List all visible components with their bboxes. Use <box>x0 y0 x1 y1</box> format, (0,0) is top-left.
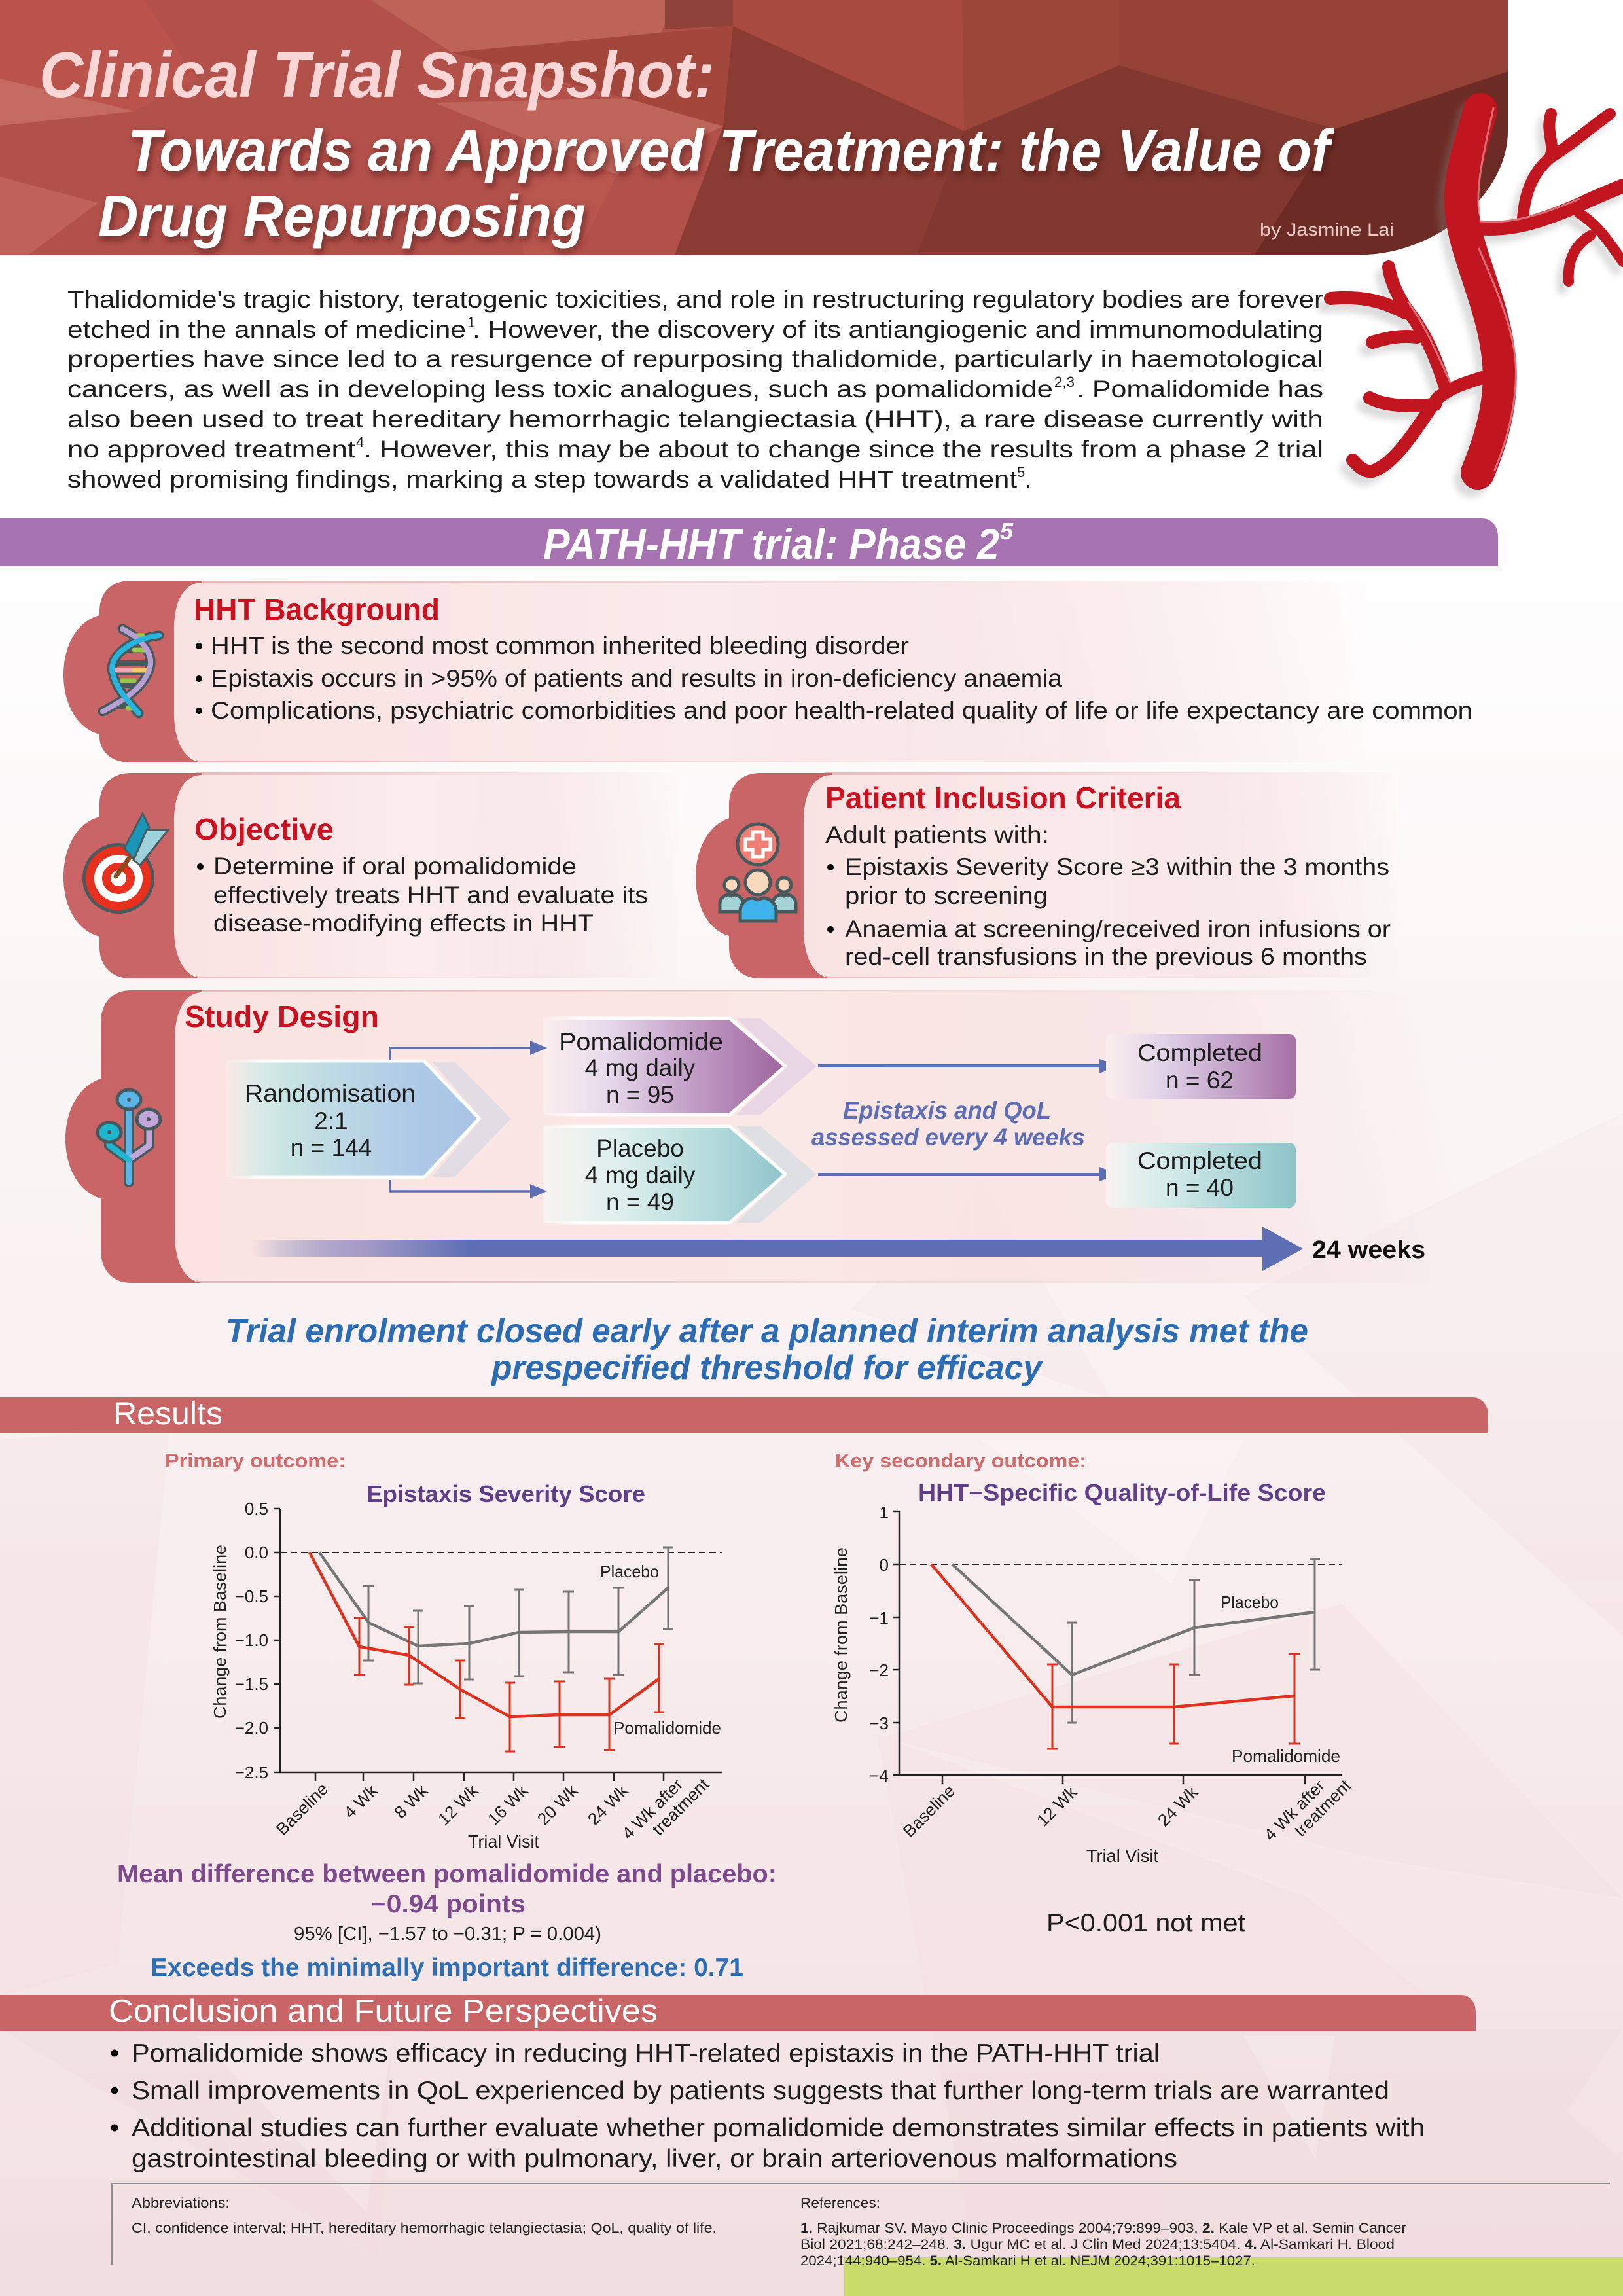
criteria text: Anaemia at screening/received iron infusions or <box>845 916 1391 942</box>
line chart: epistaxis severity score: −1.0 <box>235 1630 268 1650</box>
line chart: quality of life score: −2 <box>869 1660 889 1680</box>
line chart: quality of life score: Trial Visit <box>1086 1846 1158 1866</box>
box: placebo arm: n = 49 <box>606 1189 674 1215</box>
heading: Objective <box>194 812 334 846</box>
panel: primary outcome <box>117 1449 777 1982</box>
conclusion bullets: gastrointestinal bleeding or with pulmonary, liver, or brain arteriovenous malformations <box>132 2145 1177 2173</box>
line chart: quality of life score <box>831 1503 1355 1866</box>
line chart: epistaxis severity score: Change from Baseline <box>210 1545 230 1719</box>
objective text <box>197 853 648 937</box>
line chart: epistaxis severity score: Placebo <box>600 1562 659 1581</box>
illustration: blood vessel <box>1324 108 1623 480</box>
intro paragraph: properties have since led to a resurgence of repurposing thalidomide, particularly in haemotological <box>67 346 1323 372</box>
box: completed pomalidomide: n = 62 <box>1166 1067 1234 1094</box>
assessment note: Epistaxis and QoL <box>843 1097 1051 1124</box>
line chart: epistaxis severity score: −2.0 <box>235 1718 268 1738</box>
minimally important difference: Exceeds the minimally important difference: 0.71 <box>151 1954 743 1982</box>
objective text: disease-modifying effects in HHT <box>213 910 594 937</box>
objective text: Determine if oral pomalidomide <box>213 853 577 880</box>
box: completed pomalidomide: Completed <box>1137 1039 1262 1066</box>
line chart: epistaxis severity score: 0.0 <box>245 1543 268 1562</box>
abbreviations <box>132 2196 717 2236</box>
result: p value: P<0.001 not met <box>1046 1909 1245 1937</box>
box: randomisation: 2:1 <box>314 1107 348 1134</box>
icon: target with arrow <box>82 814 168 914</box>
confidence interval: 95% [CI], −1.57 to −0.31; P = 0.004) <box>294 1924 601 1945</box>
box: completed placebo <box>1106 1143 1296 1208</box>
line chart: quality of life score: −3 <box>869 1713 889 1733</box>
references: 2024;144:940–954. 5. Al-Samkari H et al. NEJM 2024;391:1015–1027. <box>800 2253 1255 2269</box>
conclusion bullets <box>111 2039 1425 2173</box>
panel: patient inclusion criteria <box>696 772 1400 978</box>
line chart: quality of life score: Placebo <box>1221 1592 1279 1612</box>
decorative green corner block <box>844 2257 1623 2296</box>
arrow: 24 week timeline: 24 weeks <box>1312 1236 1425 1264</box>
line chart: quality of life score: Change from Baseline <box>831 1547 851 1723</box>
result: mean difference: Mean difference between pomalidomide and placebo: <box>117 1860 777 1888</box>
line chart: quality of life score: 4 Wk after <box>1260 1776 1329 1844</box>
intro paragraph: . <box>1025 466 1031 493</box>
callout: early closure statement <box>226 1312 1308 1387</box>
conclusion bullets: Pomalidomide shows efficacy in reducing HHT-related epistaxis in the PATH-HHT trial <box>132 2039 1160 2068</box>
banner: conclusion <box>0 1994 1476 2031</box>
criteria text <box>825 821 1391 970</box>
line chart: epistaxis severity score <box>210 1499 722 1852</box>
line chart: epistaxis severity score: 24 Wk <box>584 1780 632 1829</box>
arrow: placebo to completed <box>818 1167 1118 1181</box>
intro paragraph: etched in the annals of medicine <box>67 316 466 343</box>
panel: study design <box>65 990 1453 1283</box>
panel: HHT background <box>63 581 1472 762</box>
title <box>39 39 1335 249</box>
line chart: epistaxis severity score: 12 Wk <box>434 1780 482 1829</box>
banner: results: Results <box>113 1397 223 1431</box>
line chart: epistaxis severity score: −2.5 <box>235 1763 268 1782</box>
banner: PATH-HHT trial <box>0 518 1498 568</box>
objective text: effectively treats HHT and evaluate its <box>213 882 648 908</box>
intro paragraph: 4 <box>356 434 364 450</box>
title line 3: Drug Repurposing <box>98 184 586 249</box>
box: pomalidomide arm: n = 95 <box>606 1081 674 1108</box>
intro paragraph: 2,3 <box>1054 374 1075 390</box>
line chart: epistaxis severity score: Baseline <box>272 1779 332 1839</box>
box: randomisation <box>226 1061 511 1177</box>
box: completed placebo: Completed <box>1137 1147 1262 1174</box>
references: Biol 2021;68:242–248. 3. Ugur MC et al. J Clin Med 2024;13:5404. 4. Al-Samkari H. Blood <box>800 2237 1395 2252</box>
heading: Patient Inclusion Criteria <box>825 781 1181 815</box>
intro paragraph: . However, this may be about to change since the results from a phase 2 trial <box>364 436 1323 463</box>
chart title: HHT−Specific Quality-of-Life Score <box>918 1479 1326 1506</box>
callout: early closure statement: Trial enrolment closed early after a planned interim analysis met the <box>226 1312 1308 1350</box>
arrow: randomisation to pomalidomide <box>390 1041 547 1060</box>
line chart: epistaxis severity score: 0.5 <box>245 1499 268 1518</box>
line chart: epistaxis severity score: Pomalidomide <box>613 1718 721 1738</box>
assessment note: assessed every 4 weeks <box>812 1124 1085 1151</box>
criteria text: red-cell transfusions in the previous 6 months <box>845 943 1367 970</box>
header banner <box>0 0 1512 257</box>
box: placebo arm: Placebo <box>596 1135 684 1162</box>
line chart: epistaxis severity score: 4 Wk after <box>618 1774 687 1843</box>
conclusion bullets: Additional studies can further evaluate whether pomalidomide demonstrates similar effects in patients with <box>132 2114 1425 2142</box>
subheading: Key secondary outcome: <box>835 1449 1086 1472</box>
conclusion bullets: Small improvements in QoL experienced by patients suggests that further long-term trials are warranted <box>132 2077 1389 2105</box>
line chart: quality of life score: treatment <box>1290 1775 1355 1840</box>
result: mean difference <box>117 1860 777 1918</box>
line chart: quality of life score: −1 <box>869 1608 889 1628</box>
box: pomalidomide arm: 4 mg daily <box>585 1054 696 1081</box>
result: mean difference: −0.94 points <box>371 1890 526 1918</box>
banner: PATH-HHT trial: PATH-HHT trial: Phase 2 <box>543 520 999 568</box>
footer frame <box>112 2183 1610 2265</box>
arrow: randomisation to placebo <box>390 1180 547 1198</box>
intro paragraph: also been used to treat hereditary hemorrhagic telangiectasia (HHT), a rare disease currently with <box>67 406 1323 433</box>
line chart: quality of life score: 0 <box>880 1555 889 1575</box>
box: completed pomalidomide <box>1106 1034 1296 1099</box>
bullet list: Complications, psychiatric comorbidities and poor health-related quality of life or life expectancy are common <box>211 697 1472 724</box>
line chart: quality of life score: Baseline <box>899 1781 959 1841</box>
line chart: epistaxis severity score: 16 Wk <box>484 1780 532 1829</box>
subheading: Primary outcome: <box>165 1449 346 1472</box>
heading: Study Design <box>185 999 379 1033</box>
box: randomisation: n = 144 <box>291 1134 372 1161</box>
line chart: quality of life score: Pomalidomide <box>1232 1746 1340 1766</box>
intro paragraph <box>67 286 1323 493</box>
line chart: epistaxis severity score: Trial Visit <box>468 1831 539 1852</box>
icon: branching tree <box>98 1090 160 1182</box>
panel: key secondary outcome <box>831 1449 1355 1937</box>
line chart: epistaxis severity score: treatment <box>648 1774 713 1839</box>
line chart: epistaxis severity score: 4 Wk <box>340 1780 382 1822</box>
icon: DNA helix <box>103 629 159 713</box>
criteria text: prior to screening <box>845 882 1048 909</box>
line chart: quality of life score: 1 <box>880 1503 889 1522</box>
arrow: 24 week timeline <box>251 1227 1425 1271</box>
line chart: quality of life score: −4 <box>869 1766 889 1785</box>
box: placebo arm: 4 mg daily <box>585 1162 696 1189</box>
author byline: by Jasmine Lai <box>1260 220 1394 240</box>
bullet list: HHT is the second most common inherited bleeding disorder <box>211 632 909 659</box>
line chart: epistaxis severity score: −1.5 <box>235 1674 268 1694</box>
banner: results <box>0 1397 1488 1433</box>
icon: patients with medical cross <box>720 824 796 921</box>
line chart: epistaxis severity score: 8 Wk <box>390 1780 432 1822</box>
intro paragraph: Thalidomide's tragic history, teratogenic toxicities, and role in restructuring regulatory bodies are forever <box>67 286 1323 313</box>
banner: conclusion: Conclusion and Future Perspectives <box>109 1994 658 2029</box>
box: placebo arm <box>543 1126 817 1223</box>
bullet list <box>196 632 1472 724</box>
line chart: epistaxis severity score: −0.5 <box>235 1587 268 1606</box>
references: References: <box>800 2196 880 2211</box>
box: completed placebo: n = 40 <box>1166 1174 1234 1201</box>
callout: early closure statement: prespecified threshold for efficacy <box>490 1349 1044 1387</box>
abbreviations: CI, confidence interval; HHT, hereditary hemorrhagic telangiectasia; QoL, quality of life. <box>132 2221 717 2236</box>
intro paragraph: cancers, as well as in developing less toxic analogues, such as pomalidomide <box>67 376 1053 403</box>
criteria text: Epistaxis Severity Score ≥3 within the 3 months <box>845 853 1389 880</box>
line chart: quality of life score: 24 Wk <box>1154 1782 1202 1830</box>
intro paragraph: . Pomalidomide has <box>1077 376 1323 403</box>
criteria text: Adult patients with: <box>825 821 1049 848</box>
references: 1. Rajkumar SV. Mayo Clinic Proceedings 2004;79:899–903. 2. Kale VP et al. Semin Cancer <box>800 2221 1406 2236</box>
abbreviations: Abbreviations: <box>132 2196 230 2211</box>
intro paragraph: no approved treatment <box>67 436 356 463</box>
intro paragraph: 1 <box>467 314 475 331</box>
line chart: quality of life score: 12 Wk <box>1033 1782 1081 1830</box>
heading: HHT Background <box>194 592 440 626</box>
intro paragraph: . However, the discovery of its antiangiogenic and immunomodulating <box>473 316 1323 343</box>
panel: objective <box>63 772 681 978</box>
intro paragraph: showed promising findings, marking a step towards a validated HHT treatment <box>67 466 1018 493</box>
title line 2: Towards an Approved Treatment: the Value of <box>128 118 1335 184</box>
box: randomisation: Randomisation <box>245 1080 416 1107</box>
chart title: Epistaxis Severity Score <box>366 1480 645 1507</box>
box: pomalidomide arm <box>543 1018 817 1115</box>
line chart: epistaxis severity score: 20 Wk <box>533 1780 582 1829</box>
arrow: pomalidomide to completed <box>818 1059 1118 1073</box>
assessment note <box>812 1097 1085 1151</box>
intro paragraph: 5 <box>1017 464 1025 480</box>
references <box>800 2196 1406 2269</box>
title line: Clinical Trial Snapshot: Clinical Trial Snapshot: <box>39 39 715 111</box>
bullet list: Epistaxis occurs in >95% of patients and results in iron-deficiency anaemia <box>211 665 1062 692</box>
box: pomalidomide arm: Pomalidomide <box>559 1028 723 1055</box>
banner: PATH-HHT trial: 5 <box>1000 518 1014 545</box>
